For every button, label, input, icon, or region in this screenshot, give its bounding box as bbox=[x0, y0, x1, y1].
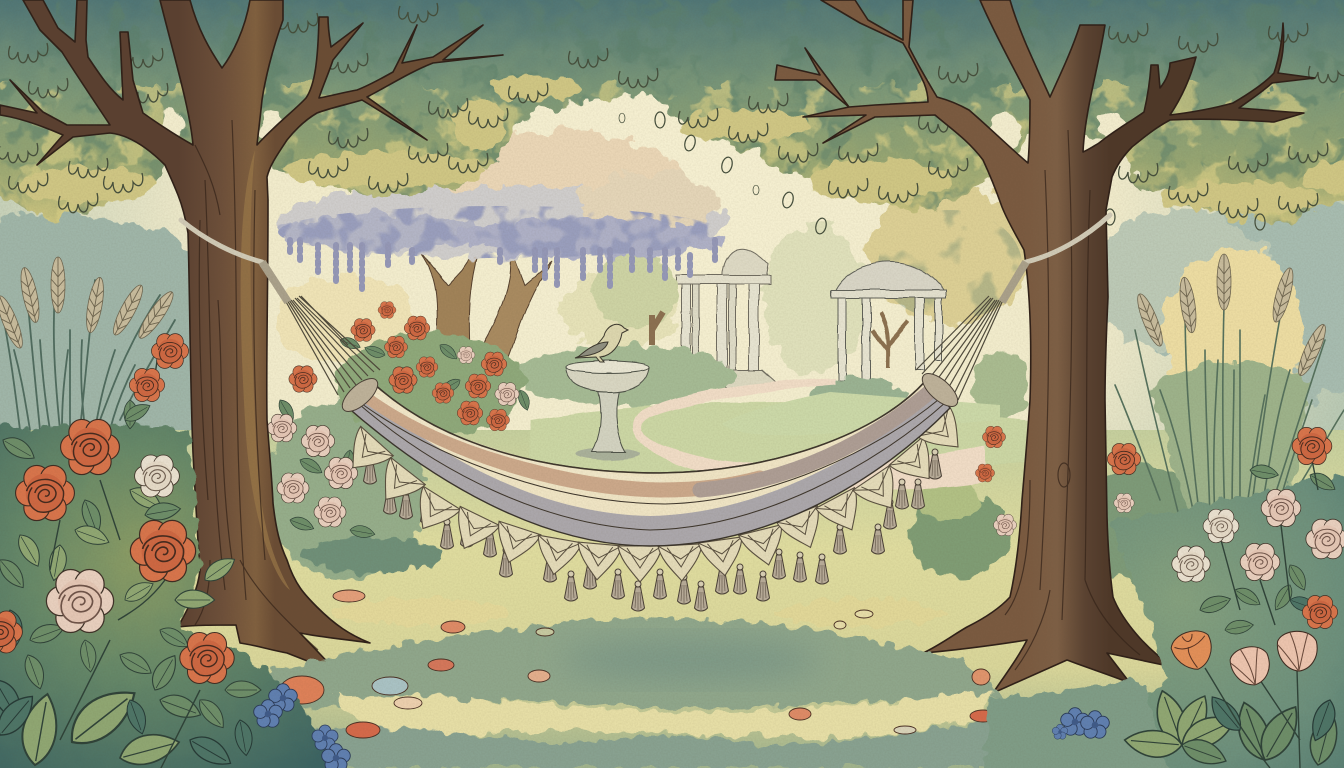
hammock knots bbox=[337, 368, 963, 417]
canopy sunlit leaves bbox=[15, 75, 1344, 214]
wisteria dapples bbox=[278, 206, 722, 258]
drifting leaves bbox=[619, 112, 1265, 235]
rose stems left bbox=[50, 340, 200, 768]
left trunk ochre highlight bbox=[241, 150, 290, 590]
blue flowers right bbox=[1052, 708, 1109, 739]
sunny patch bbox=[335, 692, 995, 738]
path inner lawn bbox=[722, 392, 1000, 435]
left tree silhouette bbox=[0, 0, 503, 673]
yellow tree dapples bbox=[878, 210, 1022, 320]
grass blades right bbox=[1115, 270, 1344, 520]
sky gaps between branches bbox=[159, 107, 1123, 157]
rose stems right bbox=[1205, 460, 1318, 768]
bird on birdbath bbox=[575, 324, 628, 362]
roses left bbox=[0, 334, 234, 684]
hammock bbox=[181, 215, 1110, 611]
gazebo right bbox=[831, 262, 946, 382]
orange roses bbox=[289, 302, 519, 431]
left foreground foliage bbox=[0, 334, 350, 768]
cloth fold lines bbox=[352, 378, 946, 530]
left grasses bbox=[0, 257, 178, 430]
lawn bbox=[0, 430, 1344, 768]
shrubs behind garden bbox=[265, 333, 1200, 585]
background bush by left gazebo bbox=[593, 252, 677, 328]
roses right bbox=[975, 426, 1344, 628]
wisteria tree bbox=[275, 130, 725, 358]
pale roses bbox=[267, 414, 358, 527]
cloth tan stripe bbox=[368, 390, 932, 490]
fallen petals bbox=[280, 590, 1125, 738]
birdbath bbox=[566, 361, 650, 460]
right foreground foliage bbox=[975, 426, 1344, 768]
macrame fringe bbox=[337, 406, 974, 582]
lawn shade right bbox=[980, 680, 1180, 768]
darker shadow heart bbox=[560, 640, 820, 680]
bush foliage bbox=[275, 335, 532, 540]
upper lawn warmth bbox=[335, 598, 505, 626]
right tree silhouette bbox=[775, 0, 1315, 693]
cloth cream layer bbox=[360, 378, 940, 516]
small background tree trunk bbox=[652, 312, 663, 345]
rose bushes behind hammock bbox=[267, 302, 532, 540]
cup flowers right bbox=[1168, 627, 1317, 688]
wisteria trunks bbox=[415, 240, 552, 358]
leaf outlines bbox=[0, 3, 1344, 218]
canopy bbox=[0, 0, 1344, 235]
wheat heads left bbox=[0, 257, 178, 351]
leaves right bbox=[1123, 463, 1343, 768]
hammock cloth base bbox=[345, 378, 950, 546]
upper lawn warmth right bbox=[775, 598, 945, 626]
right cords bbox=[916, 262, 1026, 400]
left cords bbox=[262, 262, 380, 395]
tree straps bbox=[181, 215, 1110, 262]
left tree bbox=[0, 0, 503, 673]
wisteria canopy bbox=[275, 130, 725, 258]
lawn shadow and sunlight bbox=[220, 598, 1040, 768]
dark undergrowth left bbox=[0, 424, 350, 768]
hammock tassels bbox=[364, 449, 942, 611]
grass blades left bbox=[0, 260, 175, 430]
distant misty foliage bbox=[0, 200, 1344, 465]
leaves left bbox=[0, 399, 261, 768]
wheat heads right bbox=[1133, 254, 1330, 378]
gazebo left bbox=[676, 249, 782, 388]
central lawn shadow bbox=[240, 618, 1010, 710]
right tree bbox=[775, 0, 1315, 693]
winding garden path bbox=[632, 378, 985, 490]
hanging blossoms bbox=[290, 240, 715, 292]
yellow background tree bbox=[868, 187, 1032, 323]
midground lawn bbox=[530, 402, 1030, 480]
canopy foliage with dapples bbox=[0, 0, 1344, 222]
lower shade bbox=[220, 722, 1040, 768]
grass mass right bbox=[1150, 362, 1310, 520]
blue flowers left bbox=[254, 684, 350, 768]
dark undergrowth right bbox=[1030, 470, 1344, 768]
right grasses bbox=[1115, 254, 1344, 520]
bark lines right bbox=[1005, 130, 1140, 670]
yellow tree foliage bbox=[868, 187, 1032, 323]
bark lines left bbox=[195, 120, 318, 650]
